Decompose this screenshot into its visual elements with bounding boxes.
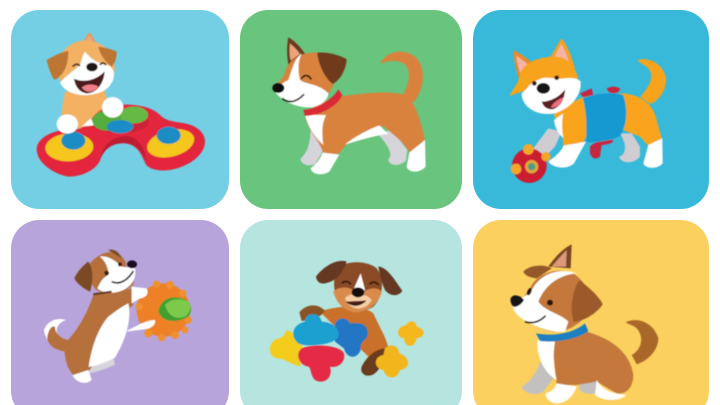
toy: yellow cross large [376,346,408,377]
dog head [509,38,581,114]
panel: dog with orange ball on lavender [11,220,229,405]
dog head [47,32,117,96]
toy: dark blue cross [335,318,368,357]
dog paws [57,114,78,134]
far legs [522,362,553,394]
toy: yellow bone block [270,330,303,367]
tail [380,52,423,103]
toy: spiked ball [511,144,551,183]
tail [44,319,68,348]
panel: dog with blocks on mint [240,220,462,405]
dog head [510,244,603,332]
toy: orange spiky ball [136,281,192,341]
tail [637,59,666,104]
red collar [303,89,342,116]
dog body [62,90,109,130]
dog body [548,93,663,168]
blue vest [583,93,626,142]
blue collar [536,323,588,342]
toy: yellow cross small [398,321,424,346]
toy: teal block [293,314,339,345]
far legs [301,130,328,165]
dog head [74,250,137,294]
dog body [537,332,633,403]
far legs [533,128,562,160]
dog body [305,92,426,174]
toy straps [580,87,620,159]
far foot [88,358,115,373]
dog head [272,37,347,107]
tail [626,320,658,364]
panel: shiba with blue vest on cyan [473,10,709,209]
dog body [299,305,388,376]
dog head [316,261,402,312]
panel: dog with blue collar on yellow [473,220,709,405]
panel: dog with red collar on green [240,10,462,209]
dog body [65,287,155,383]
toy: red spinner [37,105,205,177]
panel: dog with puzzle toy on sky blue [11,10,229,209]
toy: red block [298,346,344,382]
